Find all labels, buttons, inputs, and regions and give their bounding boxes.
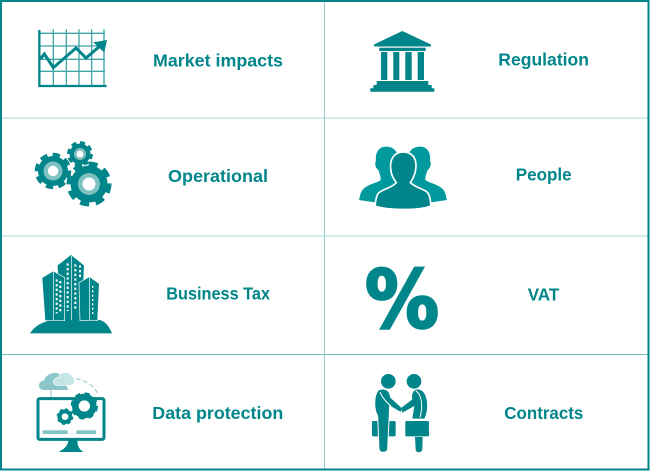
label: Data protection: Data protection <box>152 403 283 423</box>
icon: percent sign: % <box>365 254 439 346</box>
panel: people <box>359 147 572 209</box>
icon: monitor with gears and cloud <box>38 372 104 452</box>
panel: operational <box>37 143 268 204</box>
icon: rising line chart <box>39 29 107 86</box>
panel: market impacts <box>39 29 283 86</box>
label: Regulation: Regulation <box>498 50 589 70</box>
icon: two business people shaking hands <box>372 374 429 452</box>
panel: data protection <box>38 372 283 452</box>
label: Contracts: Contracts <box>504 403 584 423</box>
panel: business tax <box>30 255 270 333</box>
icon: three gears <box>37 143 109 204</box>
icon: group of people <box>359 147 447 209</box>
icon: office buildings <box>30 255 112 333</box>
label: People: People <box>516 164 572 184</box>
label: VAT: VAT <box>528 284 560 304</box>
icon: classical building <box>370 31 434 92</box>
panel: regulation <box>370 31 589 92</box>
panel: contracts <box>372 374 584 452</box>
label: Business Tax: Business Tax <box>166 283 270 303</box>
label: Market impacts: Market impacts <box>153 51 283 71</box>
panel: VAT <box>365 254 560 346</box>
label: Operational: Operational <box>168 166 268 186</box>
